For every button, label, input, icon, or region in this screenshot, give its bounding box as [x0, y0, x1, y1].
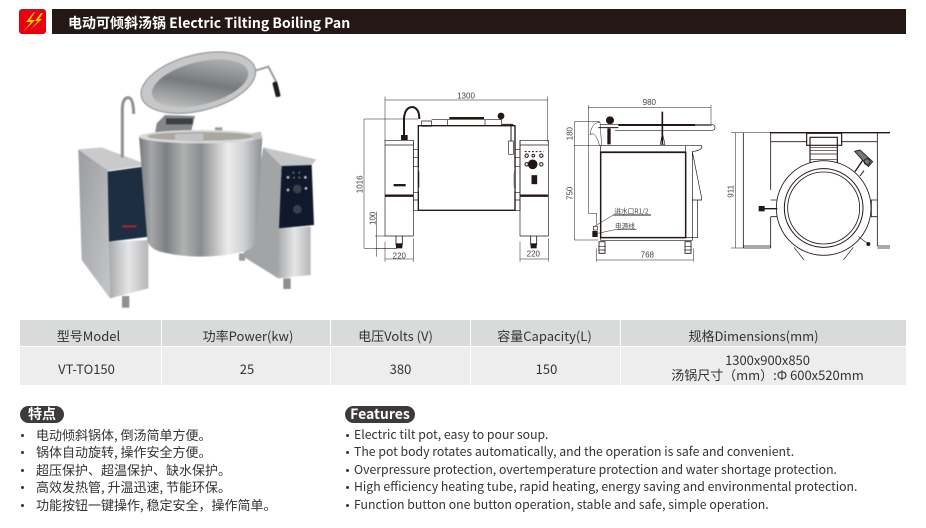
English feature list: High efficiency heating tube, rapid heating, energy saving and environmental protection. — [354, 477, 857, 495]
heading: Chinese features — [20, 406, 64, 423]
right cabinet — [239, 147, 317, 289]
table data row: 1300x900x850 — [725, 350, 810, 369]
Chinese feature list: 超压保护、超温保护、缺水保护。 — [36, 460, 231, 479]
dimension labels: 220 — [393, 251, 407, 260]
control knobs — [287, 172, 307, 214]
dimension labels: 100 — [368, 211, 377, 225]
Chinese feature list — [21, 425, 277, 514]
dimension labels: 1016 — [356, 175, 365, 193]
dimension labels: 1300 — [457, 91, 475, 100]
dimension labels: 进水口R1/2 — [614, 205, 649, 215]
English feature list: Electric tilt pot, easy to pour soup. — [354, 425, 548, 443]
table header row: 容量Capacity(L) — [497, 326, 592, 345]
icon: lightning bolt — [19, 9, 46, 34]
table header row: 功率Power(kw) — [203, 326, 293, 345]
dimension labels: 768 — [641, 251, 655, 260]
dimension labels: 750 — [565, 186, 574, 200]
faucet — [122, 98, 134, 157]
heading: English features: Features — [350, 404, 410, 424]
Chinese feature list: 高效发热管, 升温迅速, 节能环保。 — [36, 477, 231, 496]
Chinese feature list: 电动倾斜锅体, 倒汤简单方便。 — [36, 425, 212, 444]
pot body — [139, 130, 262, 257]
control panel symbols — [525, 152, 543, 184]
Chinese feature list: 功能按钮一键操作, 稳定安全，操作简单。 — [36, 495, 277, 514]
left cabinet — [78, 147, 149, 308]
table data row — [20, 347, 906, 385]
dimension lines — [364, 97, 548, 262]
table data row: VT-TO150 — [58, 359, 115, 378]
product photo: tilting boiling pan — [78, 50, 316, 308]
dimension label: 911 — [726, 184, 735, 198]
table data row: 25 — [240, 359, 254, 378]
front view drawing — [356, 91, 549, 262]
dimension lines — [574, 105, 711, 262]
table data row: 汤锅尺寸（mm）:Φ 600x520mm — [671, 365, 864, 384]
table header row — [20, 320, 906, 346]
dimension labels: 980 — [643, 98, 657, 107]
table header row: 电压Volts (V) — [358, 326, 433, 345]
table data row: 380 — [390, 359, 411, 378]
dimension labels — [356, 91, 541, 260]
dimension labels — [565, 98, 657, 260]
table header row: 规格Dimensions(mm) — [688, 326, 819, 345]
dimension labels: 180 — [565, 126, 574, 140]
English feature list: Function button one button operation, stable and safe, simple operation. — [354, 495, 769, 513]
title bar — [52, 9, 906, 34]
Chinese feature list: 锅体自动旋转, 操作安全方便。 — [36, 442, 212, 461]
pot lid and handle — [135, 41, 281, 133]
dimension line — [731, 133, 770, 248]
heading: Chinese features: 特点 — [28, 404, 56, 424]
dimension labels: 电源线 — [615, 220, 635, 230]
English feature list: Overpressure protection, overtemperature protection and water shortage protection. — [354, 460, 837, 478]
top view drawing — [726, 132, 890, 260]
table header row: 型号Model — [57, 326, 120, 345]
English feature list: The pot body rotates automatically, and the operation is safe and convenient. — [354, 442, 794, 460]
side view drawing — [565, 98, 716, 262]
specification table — [20, 320, 906, 385]
English feature list — [346, 425, 857, 513]
dimension labels: 220 — [527, 250, 541, 259]
table data row: 150 — [536, 359, 557, 378]
title bar: 电动可倾斜汤锅 Electric Tilting Boiling Pan — [68, 13, 350, 33]
